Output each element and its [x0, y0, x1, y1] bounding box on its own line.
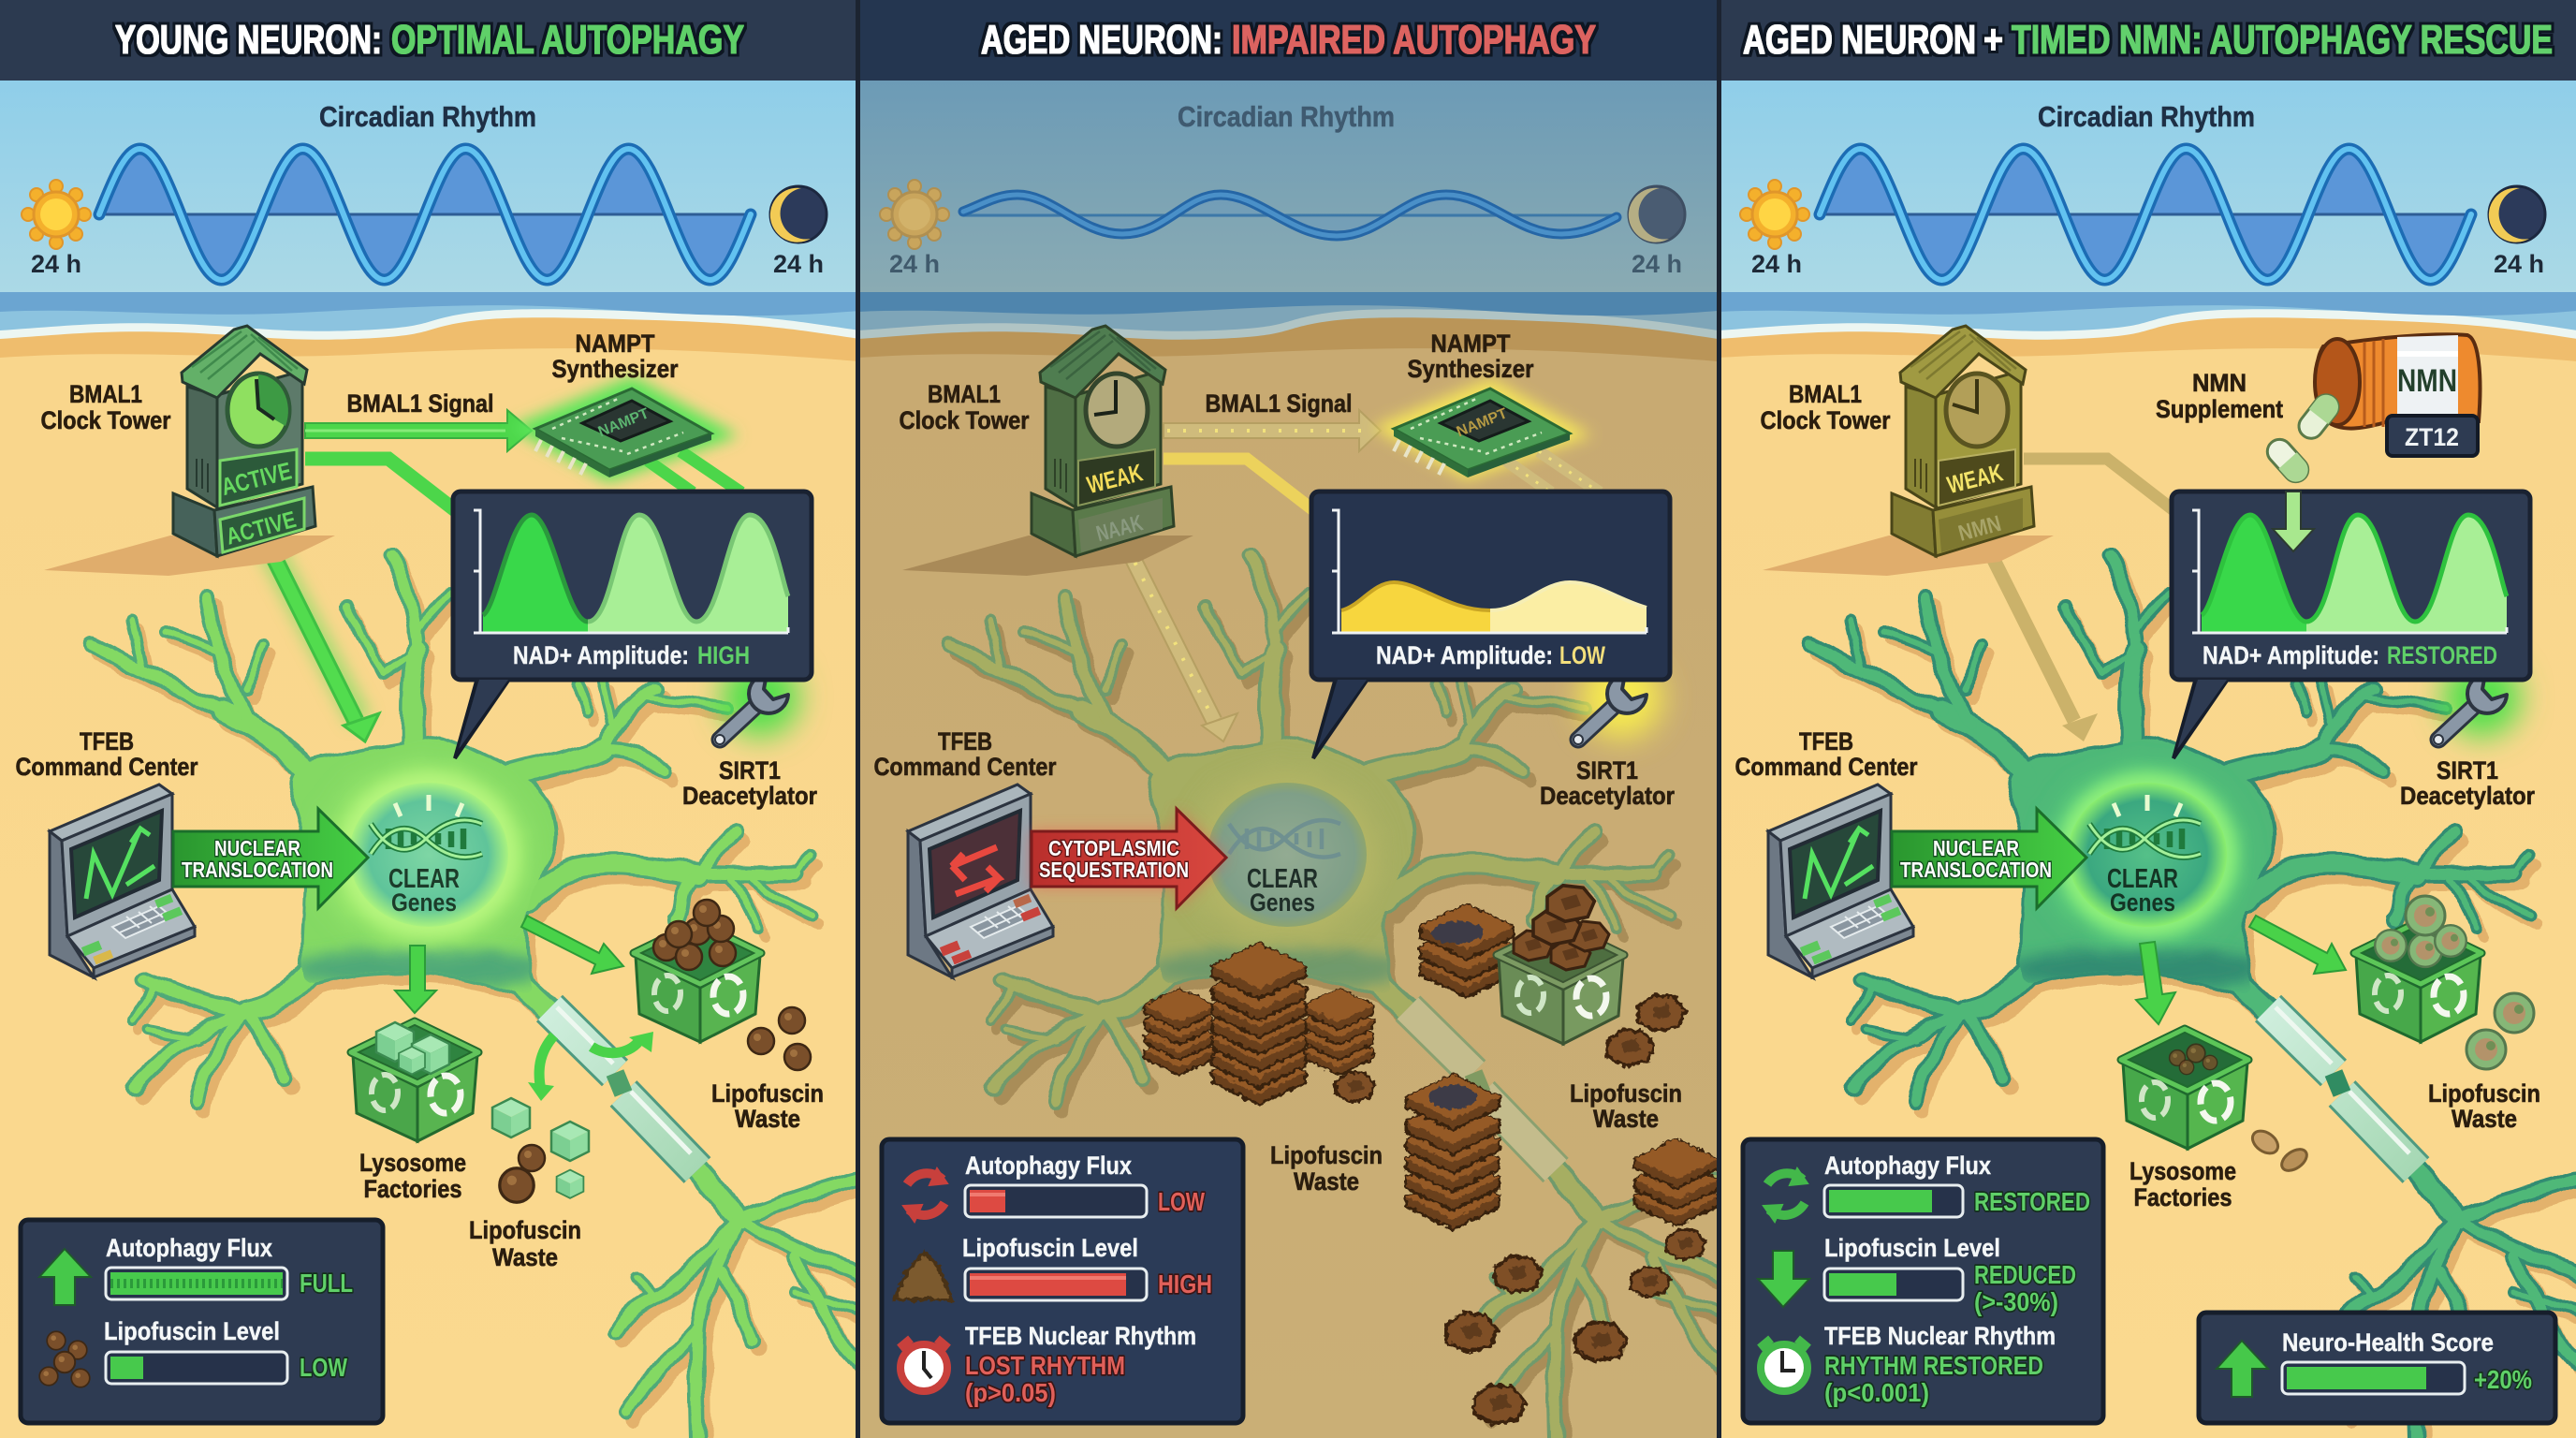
icon: tfeb computer with red screen [908, 785, 1053, 977]
dotted arrow: weak signal to nampt [1164, 410, 1381, 451]
label: nampt synthesizer [1408, 330, 1534, 383]
label: nmn supplement: Supplement [2156, 395, 2283, 423]
label: nmn supplement [2156, 369, 2283, 423]
icon: bmal1 clock tower weak: WEAK [1084, 458, 1146, 499]
lipofuscin level metric: LOW [300, 1353, 347, 1382]
icon: bmal1 clock tower: WEAK [1944, 458, 2006, 499]
icons: digested lipofuscin capsules [2248, 1126, 2310, 1175]
lipofuscin level metric [104, 1317, 347, 1384]
label: lipofuscin waste right: Waste [2452, 1105, 2517, 1133]
icon: nampt chip with yellow glow: NAMPT [1455, 405, 1510, 440]
icon: nampt chip with yellow glow [1394, 389, 1600, 492]
nucleus with clear genes [2057, 772, 2237, 937]
label: lipofuscin waste right [1570, 1079, 1682, 1133]
labels: 24 h: 24 h [773, 250, 824, 278]
icons: sun and moon [22, 180, 827, 249]
arrow: nuclear translocation: NUCLEAR [1933, 836, 2019, 860]
sky [858, 81, 1718, 292]
label: lipofuscin waste right: Lipofuscin [2428, 1079, 2540, 1108]
label: tfeb command center: Command Center [15, 753, 198, 781]
nucleus with inactive clear genes: Genes [1250, 888, 1315, 917]
autophagy flux metric [1824, 1152, 2090, 1217]
icon: lipofuscin stack near bin [1420, 904, 1514, 997]
lipofuscin level metric: Lipofuscin Level [1824, 1234, 2000, 1262]
panel header bar: + [1983, 17, 2003, 63]
panel: stats aged [882, 1139, 1243, 1423]
panel: aged neuron, impaired autophagy [858, 0, 1724, 1438]
shoreline [0, 292, 859, 361]
nucleus with inactive clear genes [1208, 783, 1367, 927]
icons: dim sun and moon [880, 180, 1685, 249]
tfeb rhythm metric: RHYTHM RESTORED [1824, 1351, 2043, 1380]
badge: zt12 [2387, 416, 2478, 456]
label: tfeb command center [874, 727, 1057, 781]
arrow: bmal1 signal to nucleus [269, 547, 379, 741]
label: lipofuscin waste center: Waste [492, 1243, 558, 1271]
callout: nad+ amplitude restored: NAD+ Amplitude: [2203, 641, 2379, 669]
label: bmal1 clock tower: Clock Tower [899, 406, 1030, 434]
label: nampt synthesizer: NAMPT [1430, 330, 1511, 358]
arrow: nuclear translocation: TRANSLOCATION [182, 858, 333, 882]
panel header bar [1719, 0, 2576, 81]
label: lipofuscin waste right: Lipofuscin [1570, 1079, 1682, 1108]
icon: bmal1 clock tower weak [902, 326, 1193, 576]
label: lysosome factories [359, 1149, 466, 1203]
labels: 24 h [889, 250, 1682, 278]
icon: lipofuscin pile [894, 1253, 952, 1299]
label: sirt1 deacetylator: SIRT1 [719, 756, 781, 785]
nucleus with clear genes: Genes [391, 888, 457, 917]
label: tfeb command center [1735, 727, 1918, 781]
nmn bottle text: NMN [2397, 363, 2457, 399]
label: sirt1 deacetylator [2400, 756, 2535, 810]
lipofuscin level metric [962, 1234, 1212, 1300]
label: lipofuscin waste right [2428, 1079, 2540, 1133]
label: bmal1 clock tower [899, 380, 1030, 434]
icon: down arrow [1758, 1251, 1809, 1307]
icon: bmal1 clock tower: NMN [1955, 511, 2004, 547]
tfeb rhythm metric: TFEB Nuclear Rhythm [965, 1322, 1196, 1350]
nucleus with inactive clear genes: CLEAR [1247, 864, 1318, 894]
label: tfeb command center: TFEB [1799, 727, 1853, 756]
label: bmal1 clock tower [1760, 380, 1891, 434]
autophagy flux metric [106, 1234, 353, 1299]
label: tfeb command center: TFEB [938, 727, 992, 756]
axon myelin sheath [2268, 1007, 2416, 1170]
label: bmal1 clock tower: Clock Tower [41, 406, 171, 434]
icon: lipofuscin granules [39, 1331, 90, 1387]
label: tfeb command center: Command Center [874, 753, 1057, 781]
arrow: weak path to nad chart [1164, 459, 1317, 513]
sky [0, 81, 859, 292]
neuron [1809, 554, 2576, 1438]
lipofuscin level metric: Lipofuscin Level [104, 1317, 280, 1345]
callout: nad+ amplitude high: NAD+ Amplitude: [513, 641, 689, 669]
arrow: nucleus to recycling bin [521, 916, 623, 974]
icon: nampt chip [535, 389, 741, 492]
arrow: clock to nad chart [305, 459, 459, 513]
icon: nampt chip: NAMPT [596, 405, 651, 440]
label: bmal1 clock tower [41, 385, 170, 429]
icon: lysosome recycling bin with cubes [351, 1021, 478, 1141]
panel header bar: AGED NEURON [1743, 17, 1976, 63]
lipofuscin level metric: REDUCED [1974, 1260, 2076, 1289]
arrow: cytoplasmic sequestration: CYTOPLASMIC [1048, 836, 1179, 860]
icon: curved arrow to bin [592, 1032, 653, 1053]
panel: young neuron, optimal autophagy [0, 0, 866, 1438]
circadian rhythm heading: Circadian Rhythm [2038, 100, 2255, 133]
label: lysosome factories: Factories [363, 1175, 462, 1203]
callout: nad+ amplitude low: LOW [1559, 641, 1605, 669]
tfeb rhythm metric: (p<0.001) [1824, 1378, 1929, 1407]
label: lipofuscin waste center [469, 1216, 581, 1271]
icon: bmal1 clock tower [44, 326, 335, 576]
sky [1719, 81, 2576, 292]
icon: up arrow [2217, 1341, 2268, 1397]
label: lipofuscin waste center: Lipofuscin [469, 1216, 581, 1244]
icon: curved arrow head [528, 1082, 554, 1101]
dotted arrow: weak signal to nucleus [1127, 547, 1237, 741]
axon myelin sheath degraded [1408, 1008, 1556, 1170]
icons: digested lipofuscin granules [2466, 993, 2534, 1069]
nucleus with clear genes: CLEAR [388, 864, 460, 894]
icon: sirt1 wrench [1573, 656, 1662, 744]
label: lipofuscin waste right [711, 1079, 824, 1133]
icon: lipofuscin stacks at soma [1144, 944, 1375, 1105]
labels: 24 h: 24 h [1751, 250, 1802, 278]
icon: up arrow [39, 1249, 91, 1305]
icons: lipofuscin on axon terminals [1446, 995, 1719, 1424]
labels: 24 h: 24 h [889, 250, 940, 278]
icon: sirt1 wrench [2434, 658, 2521, 744]
arrow: bmal1 signal to nampt [305, 410, 532, 451]
label: lipofuscin waste center: Waste [1294, 1167, 1359, 1196]
icons: lipofuscin granules [748, 1007, 811, 1070]
divider between panels [1717, 0, 1721, 1438]
panel header bar: YOUNG NEURON: [115, 17, 382, 63]
icon: green cycle [1764, 1168, 1808, 1222]
arrow: nmn into chart [2273, 492, 2314, 551]
shoreline [858, 292, 1718, 361]
panel: stats young [21, 1220, 383, 1423]
arrow: weak signal to nucleus [1987, 547, 2098, 741]
label: bmal1 signal: BMAL1 Signal [1206, 389, 1352, 418]
labels: 24 h: 24 h [31, 250, 81, 278]
arrow: cytoplasmic sequestration [1032, 809, 1226, 908]
icon: waste recycling bin with lipofuscin [634, 900, 761, 1042]
labels: 24 h [1751, 250, 2544, 278]
arrow: nucleus to lysosome [2136, 942, 2175, 1024]
chart: circadian wave low amplitude [963, 195, 1617, 236]
shoreline [1719, 292, 2576, 361]
icon: bmal1 clock tower weak: NAAK [1093, 510, 1146, 547]
panel: neuro-health score [2199, 1313, 2555, 1423]
label: lipofuscin waste right: Waste [1593, 1105, 1659, 1133]
icon: sirt1 wrench [715, 658, 799, 744]
icon: curved arrow down from axon [539, 1035, 554, 1091]
autophagy flux metric: Autophagy Flux [106, 1234, 272, 1262]
icon: bmal1 clock tower [1763, 326, 2054, 576]
label: lipofuscin waste right: Lipofuscin [711, 1079, 824, 1108]
tfeb rhythm metric: TFEB Nuclear Rhythm [1824, 1322, 2056, 1350]
callout: nad+ amplitude restored [2172, 492, 2530, 758]
lipofuscin level metric: HIGH [1158, 1269, 1212, 1299]
panel header bar [858, 0, 1718, 81]
badge: zt12: ZT12 [2405, 423, 2459, 451]
callout: nad+ amplitude restored: RESTORED [2387, 641, 2497, 669]
panel: stats rescue [1743, 1139, 2103, 1423]
icon: red cycle [903, 1168, 947, 1222]
labels: 24 h [32, 255, 822, 272]
chart: circadian wave high amplitude [99, 149, 751, 280]
label: lysosome factories: Lysosome [359, 1149, 466, 1177]
icon: tfeb computer [1768, 785, 1913, 977]
autophagy flux metric [965, 1152, 1205, 1217]
panel header bar [0, 0, 859, 81]
icon: lipofuscin stack on axon [1406, 1075, 1500, 1229]
icons: nmn capsules [2262, 390, 2343, 487]
callout: nad+ amplitude low [1311, 492, 1670, 758]
icon: tfeb computer [50, 785, 195, 977]
sand [1719, 328, 2576, 1438]
chart: circadian wave restored [1820, 149, 2471, 280]
label: sirt1 deacetylator: Deacetylator [2400, 782, 2535, 810]
circadian rhythm heading: Circadian Rhythm [319, 100, 536, 133]
labels: 24 h: 24 h [1632, 250, 1682, 278]
label: sirt1 deacetylator: Deacetylator [682, 782, 817, 810]
neuron [91, 554, 866, 1438]
label: lipofuscin waste right: Waste [735, 1105, 800, 1133]
autophagy flux metric: RESTORED [1974, 1187, 2090, 1216]
neuro-health metric: +20% [2474, 1365, 2532, 1394]
tfeb rhythm metric [1824, 1322, 2056, 1407]
tfeb rhythm metric: LOST RHYTHM [965, 1351, 1125, 1380]
neuro-health metric [2282, 1328, 2532, 1394]
label: nampt synthesizer [552, 330, 679, 383]
icon: lysosome recycling bin with small waste [2121, 1029, 2248, 1149]
circadian rhythm heading: Circadian Rhythm [1178, 100, 1395, 133]
icon: bmal1 clock tower: ACTIVE [224, 506, 299, 550]
panel header bar: AGED NEURON: [981, 17, 1222, 63]
label: bmal1 clock tower: BMAL1 [928, 380, 1001, 408]
label: sirt1 deacetylator [1540, 756, 1675, 810]
icon: waste recycling bin overflowing [1497, 886, 1624, 1044]
arrow: nuclear translocation: TRANSLOCATION [1900, 858, 2052, 882]
icon: red alarm clock [900, 1339, 948, 1391]
label: lysosome factories: Factories [2134, 1183, 2232, 1211]
lipofuscin level metric: (>-30%) [1974, 1287, 2058, 1316]
label: bmal1 clock tower: Clock Tower [1760, 406, 1891, 434]
icon: nmn pill bottle [2315, 334, 2481, 429]
label: lipofuscin waste center: Lipofuscin [1270, 1141, 1383, 1169]
label: bmal1 clock tower: BMAL1 [1789, 380, 1862, 408]
label: nampt synthesizer: Synthesizer [552, 355, 679, 383]
label: bmal1 clock tower: BMAL1 [69, 380, 142, 408]
panel header bar: OPTIMAL AUTOPHAGY [391, 17, 744, 63]
arrow: nucleus to recycling bin [2249, 916, 2346, 974]
label: lysosome factories [2130, 1157, 2236, 1211]
neuro-health metric: Neuro-Health Score [2282, 1328, 2494, 1357]
nucleus with clear genes: CLEAR [2107, 864, 2178, 894]
nucleus with clear genes: Genes [2110, 888, 2175, 917]
tfeb rhythm metric: (p>0.05) [965, 1378, 1056, 1407]
icons: sun and moon [1740, 180, 2545, 249]
label: sirt1 deacetylator: Deacetylator [1540, 782, 1675, 810]
icon: waste recycling bin with cleared waste [2354, 896, 2481, 1042]
panel: aged neuron plus timed nmn, autophagy rescue [1719, 0, 2576, 1438]
autophagy flux metric: Autophagy Flux [965, 1152, 1132, 1180]
label: sirt1 deacetylator [682, 756, 817, 810]
axon myelin sheath [549, 1007, 697, 1170]
autophagy flux metric: LOW [1158, 1187, 1205, 1216]
nucleus with clear genes [339, 772, 519, 937]
sand [0, 328, 859, 1438]
labels: 24 h: 24 h [2494, 250, 2544, 278]
lipofuscin level metric: Lipofuscin Level [962, 1234, 1138, 1262]
arrow: nuclear translocation: NUCLEAR [214, 836, 300, 860]
arrow: nuclear translocation [173, 809, 368, 908]
callout: nad+ amplitude high [453, 492, 812, 758]
icon: green alarm clock [1760, 1339, 1808, 1391]
label: nmn supplement: NMN [2192, 369, 2247, 397]
sand [858, 328, 1718, 1438]
autophagy flux metric: FULL [300, 1269, 353, 1298]
label: bmal1 signal: BMAL1 Signal [346, 389, 494, 418]
divider between panels [856, 0, 860, 1438]
label: tfeb command center: TFEB [80, 727, 134, 756]
arrow: weak path to nad chart [2024, 459, 2177, 513]
label: lipofuscin waste center [1270, 1141, 1383, 1196]
lipofuscin level metric [1824, 1234, 2076, 1316]
label: sirt1 deacetylator: SIRT1 [1576, 756, 1638, 785]
neuron [949, 554, 1724, 1438]
icons: loose cubes and lipofuscin [492, 1098, 589, 1202]
label: tfeb command center: Command Center [1735, 753, 1918, 781]
label: nampt synthesizer: NAMPT [575, 330, 655, 358]
icon: bmal1 clock tower: ACTIVE [218, 457, 294, 501]
label: tfeb command center [15, 727, 198, 781]
arrow: nucleus to lysosome [395, 946, 436, 1013]
tfeb rhythm metric [965, 1322, 1196, 1407]
autophagy flux metric: Autophagy Flux [1824, 1152, 1991, 1180]
panel header bar: IMPAIRED AUTOPHAGY [1232, 17, 1596, 63]
label: lysosome factories: Lysosome [2130, 1157, 2236, 1185]
callout: nad+ amplitude high: HIGH [697, 641, 750, 669]
label: sirt1 deacetylator: SIRT1 [2437, 756, 2498, 785]
label: nampt synthesizer: Synthesizer [1408, 355, 1534, 383]
arrow: cytoplasmic sequestration: SEQUESTRATION [1039, 858, 1189, 882]
callout: nad+ amplitude low: NAD+ Amplitude: [1376, 641, 1553, 669]
arrow: nuclear translocation [1892, 809, 2086, 908]
